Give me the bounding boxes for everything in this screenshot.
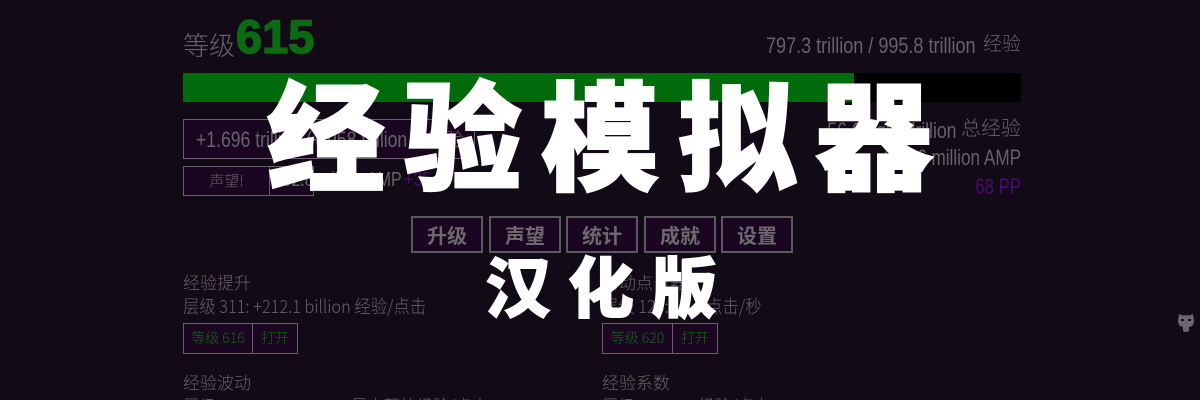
click bonus value: 958 trillion: [327, 127, 407, 152]
click unit: 经验: [426, 125, 464, 152]
subtitle: 汉化版: [485, 236, 734, 332]
prestige button: 声望!: [209, 170, 244, 191]
total experience value: 56.68 quadrillion: [827, 118, 956, 143]
panel: auto clicker: [602, 269, 761, 354]
PP total: 68 PP: [975, 174, 1021, 199]
boost level button: 等级 616: [191, 328, 245, 348]
boost open button: 打开: [261, 328, 289, 348]
tab: settings: [721, 216, 793, 253]
progress fill: [183, 73, 854, 102]
auto clicker open button: 打开: [681, 328, 709, 348]
total stats: [827, 112, 1021, 199]
level label: 等级: [183, 26, 235, 63]
auto clicker open button: [672, 323, 718, 354]
icon: github octocat: [1178, 314, 1194, 332]
panel: experience factor: [602, 371, 770, 400]
counter unit: 经验: [983, 29, 1021, 56]
tab: upgrades: 升级: [427, 220, 467, 249]
experience counter: [766, 29, 1021, 58]
auto clicker description: 层级 123: 12.5 点击/秒: [602, 293, 761, 319]
total experience unit: 总经验: [961, 112, 1021, 141]
tab: stats: [566, 216, 638, 253]
AMP total: 128.6 million AMP: [884, 145, 1021, 170]
panel: experience fluctuation: [183, 371, 488, 400]
title: 经验模拟器: [267, 44, 952, 215]
click button: [183, 119, 475, 159]
click gain value: +1.696 trillion (+: [196, 127, 322, 152]
tab: prestige: [489, 216, 561, 253]
counter value: 797.3 trillion / 995.8 trillion: [766, 33, 976, 58]
prestige gain text: +32.8 million AMP: [273, 169, 402, 191]
level number: 615: [236, 10, 314, 63]
tab: achievements: 成就: [660, 220, 700, 249]
boost level button: [183, 323, 253, 354]
panel: experience boost: [183, 269, 426, 354]
boost description: 层级 311: +212.1 billion 经验/点击: [183, 293, 426, 319]
level heading: [183, 10, 314, 63]
boost heading: 经验提升: [183, 269, 251, 294]
boost open button: [252, 323, 298, 354]
auto clicker level button: [602, 323, 673, 354]
auto clicker level button: 等级 620: [611, 328, 664, 348]
auto clicker heading: 自动点击器: [602, 269, 687, 294]
prestige button: [183, 166, 270, 196]
tab: stats: 统计: [582, 220, 622, 249]
tab: prestige: 声望: [505, 220, 545, 249]
tab: settings: 设置: [737, 220, 777, 249]
tab: upgrades: [411, 216, 483, 253]
experience progress bar: [183, 73, 1021, 102]
tab navigation: [411, 216, 793, 253]
prestige open button: 打开: [278, 170, 306, 190]
tab: achievements: [644, 216, 716, 253]
prestige open button: [269, 166, 314, 196]
prestige point gain: +35 PP: [404, 169, 457, 191]
